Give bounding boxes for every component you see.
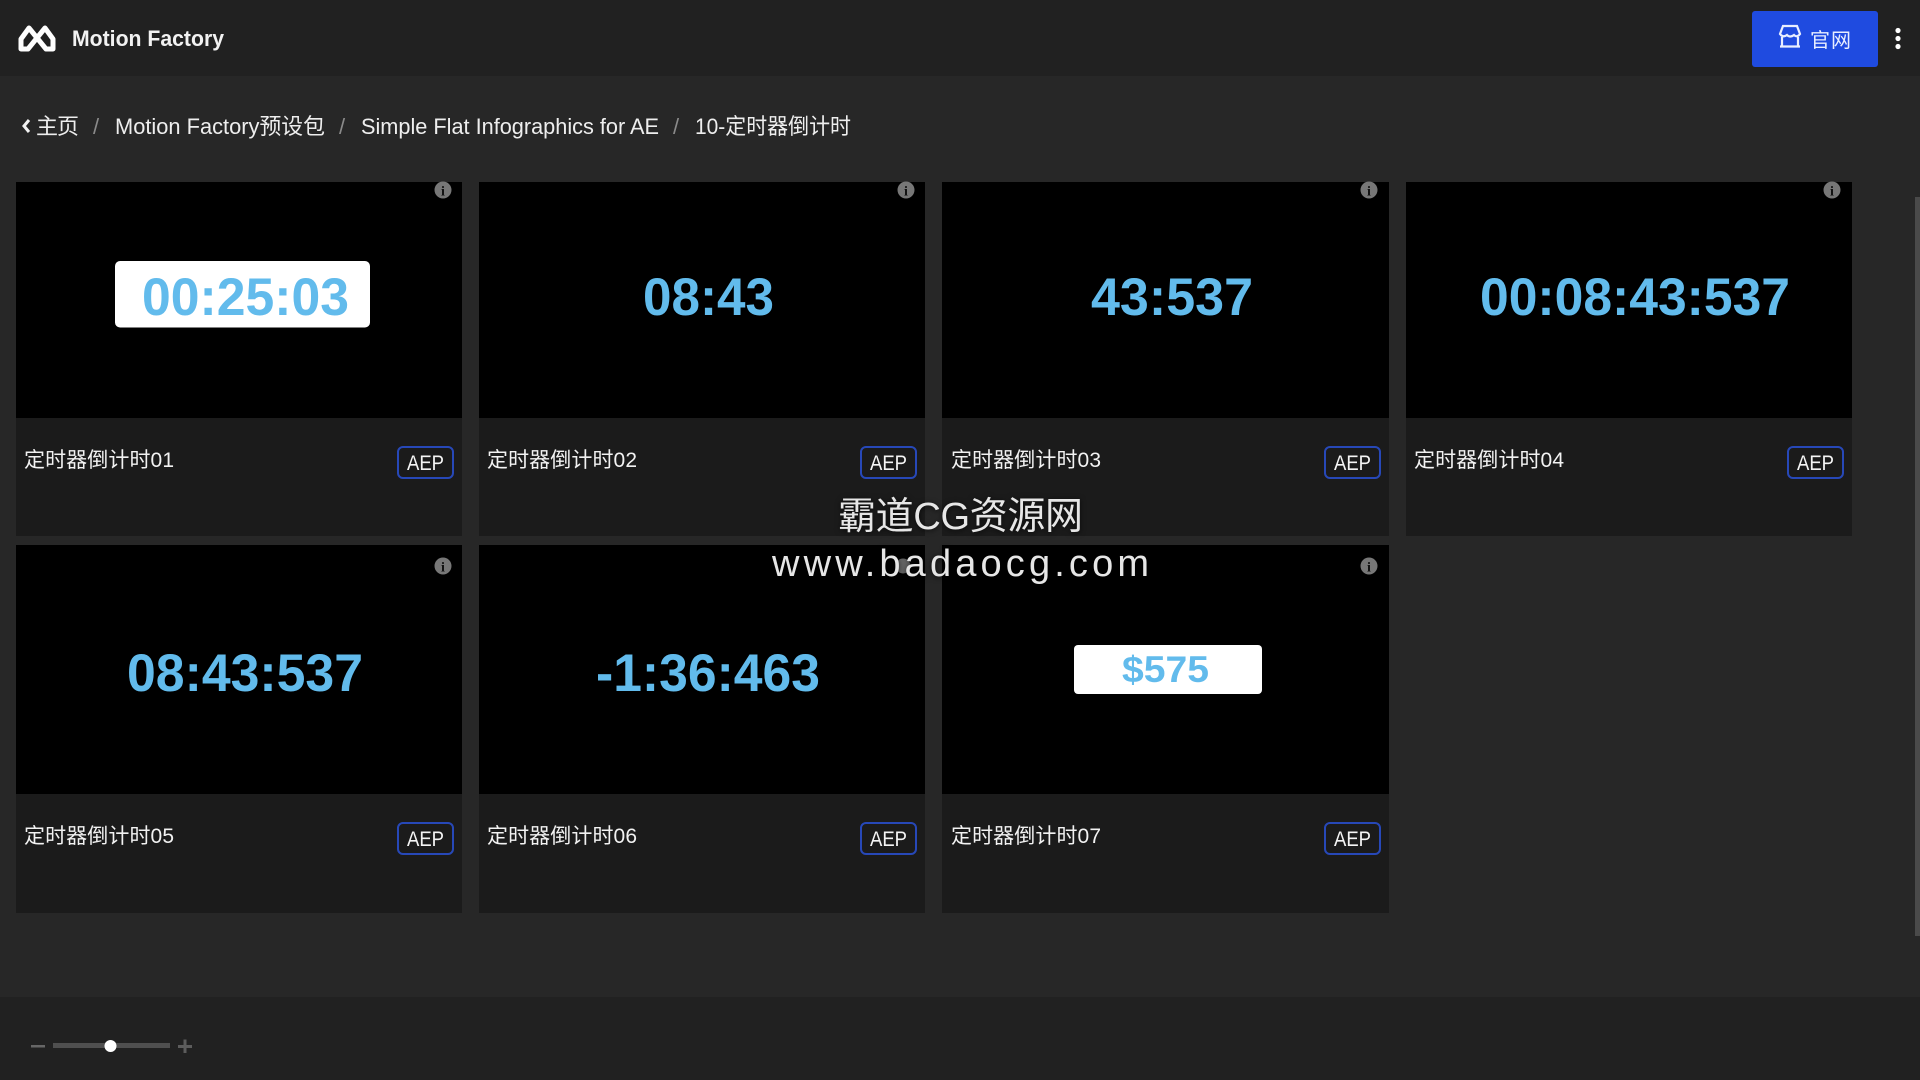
icon: info — [434, 558, 452, 576]
AEP badge: AEP — [870, 452, 907, 475]
timer value: -1:36:463 — [596, 644, 820, 703]
panel: card 06 — [479, 545, 925, 913]
icon: info: i — [1830, 184, 1834, 200]
watermark: url: www.badaocg.com — [771, 543, 1149, 585]
panel: card 05 — [16, 545, 462, 913]
icon: info: i — [1367, 560, 1371, 576]
timer value: 00:08:43:537 — [1480, 268, 1790, 327]
breadcrumb — [24, 114, 851, 139]
icon: Motion Factory logo — [21, 28, 53, 49]
panel: card 03 — [942, 182, 1389, 536]
separator: / — [673, 114, 680, 139]
icon: info: i — [441, 184, 445, 200]
panel: card 04 — [1406, 182, 1852, 536]
AEP badge: AEP — [1334, 452, 1371, 475]
AEP badge: AEP — [1334, 828, 1371, 851]
panel: card 02 — [479, 182, 925, 536]
AEP badge — [1788, 447, 1843, 478]
slider thumb — [104, 1040, 116, 1052]
timer box 00:25:03 — [115, 261, 370, 328]
timer value: 08:43 — [643, 268, 774, 327]
AEP badge: AEP — [407, 828, 444, 851]
icon: store — [1780, 26, 1800, 46]
watermark: site name: 霸道CG资源网 — [838, 496, 1083, 538]
icon: info — [898, 182, 914, 200]
card title: 定时器倒计时05 — [24, 825, 174, 848]
price value: $575 — [1122, 649, 1209, 690]
separator: / — [339, 114, 346, 139]
card title: 定时器倒计时02 — [487, 449, 637, 472]
timer value: 08:43:537 — [127, 644, 363, 703]
icon: info: i — [441, 560, 445, 576]
timer value: 00:25:03 — [142, 268, 349, 327]
icon: info: i — [904, 184, 908, 200]
panel: card 01 — [16, 182, 462, 536]
AEP badge: AEP — [870, 828, 907, 851]
icon: info — [1360, 182, 1378, 200]
crumb: pack: Motion Factory预设包 — [115, 114, 325, 139]
crumb: collection: Simple Flat Infographics for AE — [361, 114, 659, 139]
AEP badge — [861, 823, 916, 854]
icon: info: i — [1367, 184, 1371, 200]
card title: 定时器倒计时01 — [24, 449, 174, 472]
AEP badge: AEP — [407, 452, 444, 475]
AEP badge — [1325, 447, 1380, 478]
icon: info — [896, 558, 910, 574]
brand name: Motion Factory — [72, 26, 225, 51]
watermark — [771, 496, 1149, 585]
price box — [1074, 645, 1262, 694]
icon: info — [434, 182, 452, 200]
footer bar with zoom slider — [0, 997, 1920, 1080]
AEP badge: AEP — [1797, 452, 1834, 475]
AEP badge — [1325, 823, 1380, 854]
zoom out minus — [31, 1045, 45, 1048]
button label: 官网 — [1810, 29, 1851, 52]
icon: more menu — [1895, 28, 1901, 49]
panel: card 07 — [942, 545, 1389, 913]
card title: 定时器倒计时04 — [1414, 449, 1564, 472]
card title: 定时器倒计时07 — [951, 825, 1101, 848]
zoom in plus — [178, 1040, 192, 1053]
scrollbar — [1915, 197, 1920, 936]
icon: info — [1360, 558, 1378, 576]
AEP badge — [398, 447, 453, 478]
card title: 定时器倒计时03 — [951, 449, 1101, 472]
crumb: current: 10-定时器倒计时 — [695, 114, 851, 139]
AEP badge — [398, 823, 453, 854]
icon: back chevron — [24, 120, 29, 132]
header bar — [0, 0, 1920, 76]
separator: / — [93, 114, 100, 139]
timer value: 43:537 — [1091, 268, 1253, 327]
official site button — [1752, 11, 1878, 67]
card title: 定时器倒计时06 — [487, 825, 637, 848]
slider track — [53, 1043, 170, 1048]
icon: info — [1824, 182, 1840, 200]
crumb: home: 主页 — [36, 114, 79, 139]
AEP badge — [861, 447, 916, 478]
